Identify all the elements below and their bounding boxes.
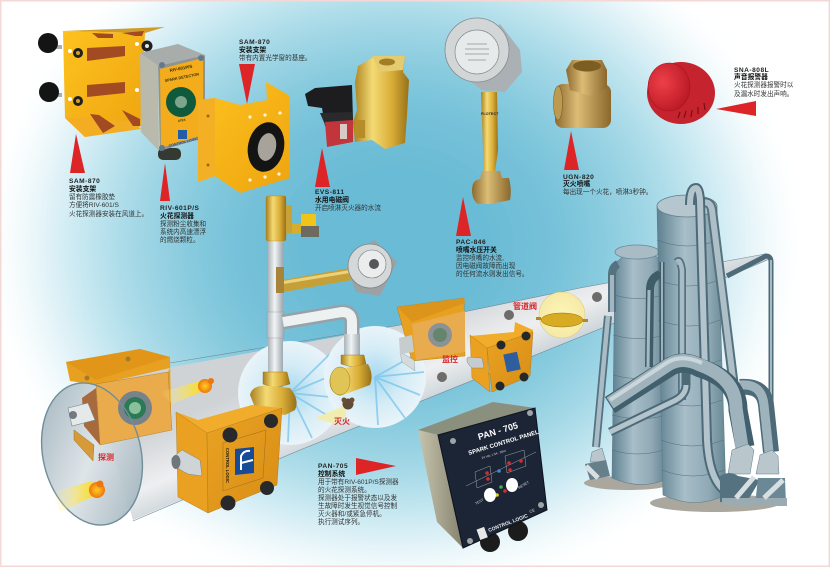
label: extinguish: 灭火	[334, 417, 350, 426]
control panel PAN-705: PAN - 705	[477, 420, 519, 442]
large headers	[610, 358, 771, 452]
text: RIV-601P/S spark detector: 的燃烧颗粒。	[160, 235, 200, 244]
text: PAN-705 control system: 控制系统	[318, 469, 345, 478]
text: RIV-601P/S spark detector: 探测粉尘收集和	[160, 219, 206, 228]
text: UGN-820 nozzle: 灭火喷嘴	[563, 179, 590, 188]
text: EVS-811 solenoid valve	[315, 189, 381, 212]
text: PAN-705 control system	[318, 463, 399, 526]
sprinkler spray left	[238, 341, 342, 445]
duct end opening	[28, 373, 156, 535]
text: PAN-705 control system: 探测器处于报警状态以及发	[318, 493, 398, 502]
spray nozzle UGN-820	[554, 60, 611, 128]
label: detect: 探测	[98, 452, 114, 462]
spark detector RIV-601P/S: RIV-601P/S	[169, 64, 193, 73]
monitoring detector box	[397, 298, 465, 371]
text: RIV-601P/S spark detector: 火花探测器	[160, 211, 194, 220]
text: SAM-870 bracket with window: SAM-870	[239, 39, 270, 46]
text: EVS-811 solenoid valve: 水用电磁阀	[315, 195, 349, 204]
thin right pipe	[727, 256, 771, 432]
label: monitor: 监控	[442, 354, 458, 364]
control panel PAN-705: RESET	[518, 480, 531, 490]
text: PAC-846 pressure switch: 喷嘴水压开关	[456, 245, 497, 254]
text: SAM-870 bracket with window: 带有内置光学窗的基座。	[239, 53, 312, 62]
water pipe network	[267, 236, 360, 404]
text: SNA-808L siren	[734, 67, 794, 98]
spark detector RIV-601P/S: ATEX	[177, 118, 186, 123]
text: RIV-601P/S spark detector: 系统内高速漂浮	[160, 227, 207, 236]
text: PAC-846 pressure switch: 因电磁阀故障而出现	[456, 261, 516, 270]
left silo pipes	[596, 262, 662, 447]
text: SAM-870 mounting bracket	[69, 178, 148, 218]
text: EVS-811 solenoid valve: EVS-811	[315, 189, 345, 196]
pressure switch on branch	[276, 240, 397, 296]
spark detector RIV-601P/S	[140, 44, 205, 160]
orange junction box	[172, 405, 282, 513]
text: EVS-811 solenoid valve: 开启喷淋灭火器的水流	[315, 203, 381, 212]
text: PAN-705 control system: PAN-705	[318, 463, 348, 470]
text: SNA-808L siren: 火花探测器报警时以	[734, 80, 794, 89]
duct valve dome	[536, 292, 588, 338]
text: SAM-870 bracket with window: 安装支架	[239, 45, 266, 54]
duct with sprinklers	[92, 254, 772, 521]
text: SNA-808L siren: 声音报警器	[734, 72, 768, 81]
control panel PAN-705: SPARK CONTROL PANEL	[468, 430, 540, 457]
control panel PAN-705	[418, 402, 547, 552]
duct end rim	[28, 373, 156, 535]
text: UGN-820 nozzle: UGN-820	[563, 174, 594, 181]
silo tower plant	[584, 188, 787, 512]
tall pipes on right silo	[677, 188, 735, 490]
duct mounted sparks	[437, 292, 602, 382]
text: SAM-870 mounting bracket: 方便将RIV-601/S	[69, 200, 119, 209]
control panel PAN-705: CE	[529, 507, 536, 514]
label: duct valve: 管道阀	[513, 301, 537, 311]
text: PAN-705 control system: 的火花探测系统。	[318, 485, 371, 494]
siren SNA-808L	[647, 62, 715, 124]
left silo	[612, 245, 665, 485]
pointer arrows	[70, 64, 756, 475]
text: SAM-870 bracket with window	[239, 39, 312, 62]
control panel PAN-705: CONTROL LOGIC	[488, 513, 529, 534]
bracket SAM-870 right	[198, 82, 290, 193]
right silo	[657, 195, 726, 502]
text: SAM-870 mounting bracket: 留有防震橡胶垫	[69, 192, 116, 201]
text: SNA-808L siren: SNA-808L	[734, 67, 769, 74]
nozzle left	[250, 372, 297, 415]
flow switch PAC-846	[445, 18, 522, 204]
text: PAN-705 control system: 用于带有RIV-601P/S探测器	[318, 477, 399, 486]
text: PAN-705 control system: 灭火器和/或紧急停机。	[318, 509, 386, 518]
bracket SAM-870 left	[38, 27, 165, 137]
text: PAC-846 pressure switch: PAC-846	[456, 239, 486, 246]
solenoid valve EVS-811	[305, 56, 409, 149]
text: UGN-820 nozzle	[563, 174, 652, 196]
spark detector RIV-601P/S: SPARK DETECTOR	[164, 72, 200, 83]
text: SAM-870 mounting bracket: SAM-870	[69, 178, 100, 185]
text: PAC-846 pressure switch	[456, 239, 529, 278]
spark flames in duct	[52, 378, 214, 512]
text: RIV-601P/S spark detector: RIV-601P/S	[160, 205, 200, 212]
small junction box	[467, 322, 533, 392]
text: SNA-808L siren: 及漏水时发出声响。	[734, 89, 793, 98]
control panel PAN-705: TEST	[474, 497, 485, 506]
control panel PAN-705: 24 Vdc 1.5A - 36W	[481, 449, 506, 460]
text: PAN-705 control system: 执行测试序列。	[318, 517, 364, 526]
text: SAM-870 mounting bracket: 火花探测器安装在风道上。	[69, 209, 148, 218]
flow switch PAC-846: FLOTECT	[481, 112, 499, 116]
ground shadows	[584, 476, 780, 512]
text: PAC-846 pressure switch: 的任何流水则发出信号。	[456, 269, 529, 278]
text: PAC-846 pressure switch: 监控喷嘴的水流,	[456, 253, 504, 262]
text: UGN-820 nozzle: 每出现一个火花，喷淋3秒钟。	[563, 187, 652, 196]
nozzle right	[330, 355, 372, 396]
spark detector RIV-601P/S: CONTROL LOGIC	[168, 137, 199, 148]
water valve on vertical pipe	[266, 196, 319, 241]
fan units	[585, 444, 787, 506]
text: RIV-601P/S spark detector	[160, 205, 207, 244]
text: SAM-870 mounting bracket: 安装支架	[69, 184, 96, 193]
detector box on duct end	[66, 349, 172, 461]
spark put out	[342, 398, 354, 410]
text: PAN-705 control system: 生故障时发生视觉信号控制	[318, 501, 398, 510]
orange junction box: CONTROL LOGIC	[225, 448, 230, 483]
sprinkler spray right	[324, 326, 426, 428]
